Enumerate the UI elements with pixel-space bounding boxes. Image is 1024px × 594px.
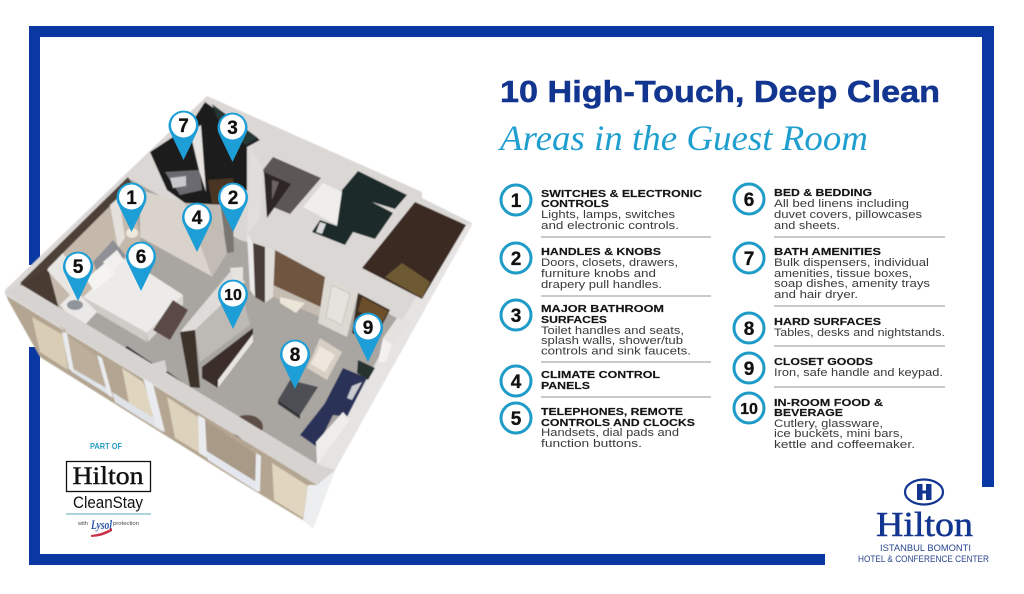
partition and TV console bbox=[180, 267, 253, 388]
walk-in closet bbox=[362, 202, 466, 299]
wall column and closet bbox=[247, 147, 321, 233]
item 4 bbox=[501, 366, 661, 396]
item 10: BEVERAGE bbox=[774, 407, 843, 419]
pin 8: 8 bbox=[290, 345, 300, 366]
Hilton CleanStay logo: with bbox=[77, 521, 88, 527]
item 4: PANELS bbox=[541, 380, 590, 392]
item 6: BED & BEDDING bbox=[774, 187, 872, 199]
item 3: MAJOR BATHROOM bbox=[541, 303, 664, 315]
item 1 bbox=[501, 185, 702, 232]
Hilton Istanbul Bomonti logo: Hilton bbox=[876, 505, 973, 544]
item 2: Doors, closets, drawers, bbox=[541, 257, 678, 269]
item 1: 1 bbox=[511, 191, 522, 212]
Hilton CleanStay logo: Hilton bbox=[72, 463, 144, 490]
Hilton Istanbul Bomonti logo: HOTEL & CONFERENCE CENTER bbox=[858, 554, 989, 565]
item 2: HANDLES & KNOBS bbox=[541, 246, 661, 258]
pin 4 bbox=[182, 203, 212, 252]
bed bbox=[47, 228, 188, 342]
pin 10: 10 bbox=[224, 287, 242, 304]
item 10: kettle and coffeemaker. bbox=[774, 439, 915, 451]
pin 9: 9 bbox=[363, 318, 373, 339]
item 3: controls and sink faucets. bbox=[541, 346, 691, 358]
item 7: amenities, tissue boxes, bbox=[774, 268, 912, 280]
3D room floor plan bbox=[5, 96, 472, 528]
item 5: TELEPHONES, REMOTE bbox=[541, 406, 683, 418]
item 9: 9 bbox=[744, 359, 754, 380]
pin 3: 3 bbox=[227, 118, 238, 139]
pin 7: 7 bbox=[178, 116, 189, 137]
item 2: drapery pull handles. bbox=[541, 279, 662, 291]
item 7: Bulk dispensers, individual bbox=[774, 257, 929, 269]
pin 3 bbox=[218, 113, 248, 162]
item 5: Handsets, dial pads and bbox=[541, 427, 679, 439]
item 9: CLOSET GOODS bbox=[774, 356, 873, 368]
armchair by desk bbox=[280, 297, 305, 313]
item 4: CLIMATE CONTROL bbox=[541, 369, 661, 381]
item 9 bbox=[734, 353, 943, 383]
living room furniture bbox=[123, 338, 392, 472]
Hilton CleanStay logo bbox=[66, 441, 151, 537]
item 8: HARD SURFACES bbox=[774, 316, 881, 328]
item 3: 3 bbox=[511, 306, 521, 327]
front wall top bbox=[5, 285, 335, 485]
item 6: 6 bbox=[744, 190, 754, 211]
pin 5 bbox=[63, 252, 93, 301]
pin 8 bbox=[280, 340, 310, 389]
item 2 bbox=[501, 243, 678, 291]
item 2: furniture knobs and bbox=[541, 268, 656, 280]
pin 5: 5 bbox=[73, 257, 84, 278]
item 6: duvet covers, pillowcases bbox=[774, 209, 923, 221]
title: 10 High-Touch, Deep Clean bbox=[500, 75, 940, 109]
bedroom back wall bbox=[20, 177, 141, 332]
Hilton Istanbul Bomonti logo: ISTANBUL BOMONTI bbox=[880, 543, 971, 554]
item 6 bbox=[734, 184, 923, 232]
facade windows bbox=[32, 317, 335, 528]
subtitle: Areas in the Guest Room bbox=[498, 118, 868, 158]
pin 6: 6 bbox=[136, 247, 146, 268]
pin 2: 2 bbox=[228, 188, 238, 209]
item 3: SURFACES bbox=[541, 314, 607, 326]
floor bbox=[22, 178, 400, 464]
Hilton CleanStay logo: PART OF bbox=[90, 441, 122, 451]
item 6: and sheets. bbox=[774, 220, 840, 232]
Hilton CleanStay logo: CleanStay bbox=[73, 494, 144, 512]
item 2: 2 bbox=[511, 249, 521, 270]
item 8: Tables, desks and nightstands. bbox=[774, 327, 945, 339]
item 10: Cutlery, glassware, bbox=[774, 418, 883, 430]
item 7 bbox=[734, 243, 931, 301]
item 7: 7 bbox=[744, 249, 754, 270]
living room back wall bbox=[273, 250, 412, 345]
pin 10 bbox=[218, 280, 248, 329]
item 8 bbox=[734, 313, 945, 343]
item 5: 5 bbox=[511, 409, 522, 430]
upper right bathroom bbox=[303, 171, 407, 245]
pin 7 bbox=[168, 111, 198, 160]
item 1: SWITCHES & ELECTRONIC bbox=[541, 188, 702, 200]
item 7: BATH AMENITIES bbox=[774, 246, 881, 258]
item 5: CONTROLS AND CLOCKS bbox=[541, 417, 695, 429]
item 1: CONTROLS bbox=[541, 198, 609, 210]
item 7: soap dishes, amenity trays bbox=[774, 278, 931, 290]
item 10: ice buckets, mini bars, bbox=[774, 428, 903, 440]
item 5 bbox=[501, 403, 695, 450]
item 8: 8 bbox=[744, 319, 754, 340]
item 5: function buttons. bbox=[541, 438, 642, 450]
item 10: IN-ROOM FOOD & bbox=[774, 397, 883, 409]
pin 6 bbox=[126, 242, 156, 291]
wall end bbox=[247, 233, 275, 303]
item 10: 10 bbox=[740, 401, 758, 418]
bathroom block bbox=[140, 102, 260, 277]
item 7: and hair dryer. bbox=[774, 289, 858, 301]
Hilton CleanStay logo: protection bbox=[113, 521, 139, 527]
item 1: and electronic controls. bbox=[541, 220, 679, 232]
item 9: Iron, safe handle and keypad. bbox=[774, 367, 943, 379]
item 3: Toilet handles and seats, bbox=[541, 325, 684, 337]
item 6: All bed linens including bbox=[774, 198, 909, 210]
item 1: Lights, lamps, switches bbox=[541, 209, 676, 221]
pin 4: 4 bbox=[192, 208, 203, 229]
pin 1: 1 bbox=[126, 188, 137, 209]
item 3: splash walls, shower/tub bbox=[541, 335, 683, 347]
pin 1 bbox=[116, 183, 146, 232]
pin 9 bbox=[353, 313, 383, 362]
Hilton Istanbul Bomonti logo bbox=[858, 480, 989, 565]
pin 2 bbox=[218, 183, 248, 232]
item 3 bbox=[501, 300, 691, 358]
item 4: 4 bbox=[511, 372, 522, 393]
item 10 bbox=[734, 393, 915, 451]
Hilton CleanStay logo: Lysol bbox=[90, 517, 112, 532]
